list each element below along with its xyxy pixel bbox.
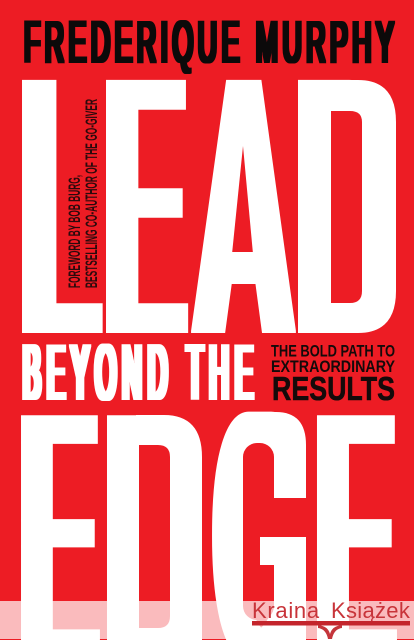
watermark logo: Książek: [331, 598, 411, 623]
watermark band: [0, 601, 414, 639]
title word: LEAD: A: [202, 2, 286, 410]
subtitle: [271, 342, 396, 407]
watermark logo: Kraina: [252, 598, 320, 623]
title word: LEAD: L: [22, 2, 96, 410]
foreword credit: FOREWORD BY BOB BURG,: [65, 175, 84, 288]
title word: BEYOND THE: BEYOND THE: [23, 329, 253, 416]
foreword credit: [65, 99, 101, 288]
title word: LEAD: E: [108, 3, 182, 410]
watermark logo: [252, 598, 411, 639]
title word: LEAD: D: [298, 1, 391, 409]
title word: LEAD: [22, 1, 396, 410]
author name: FREDERIQUE MURPHY: [24, 9, 394, 75]
title word: EDGE: [23, 340, 391, 640]
